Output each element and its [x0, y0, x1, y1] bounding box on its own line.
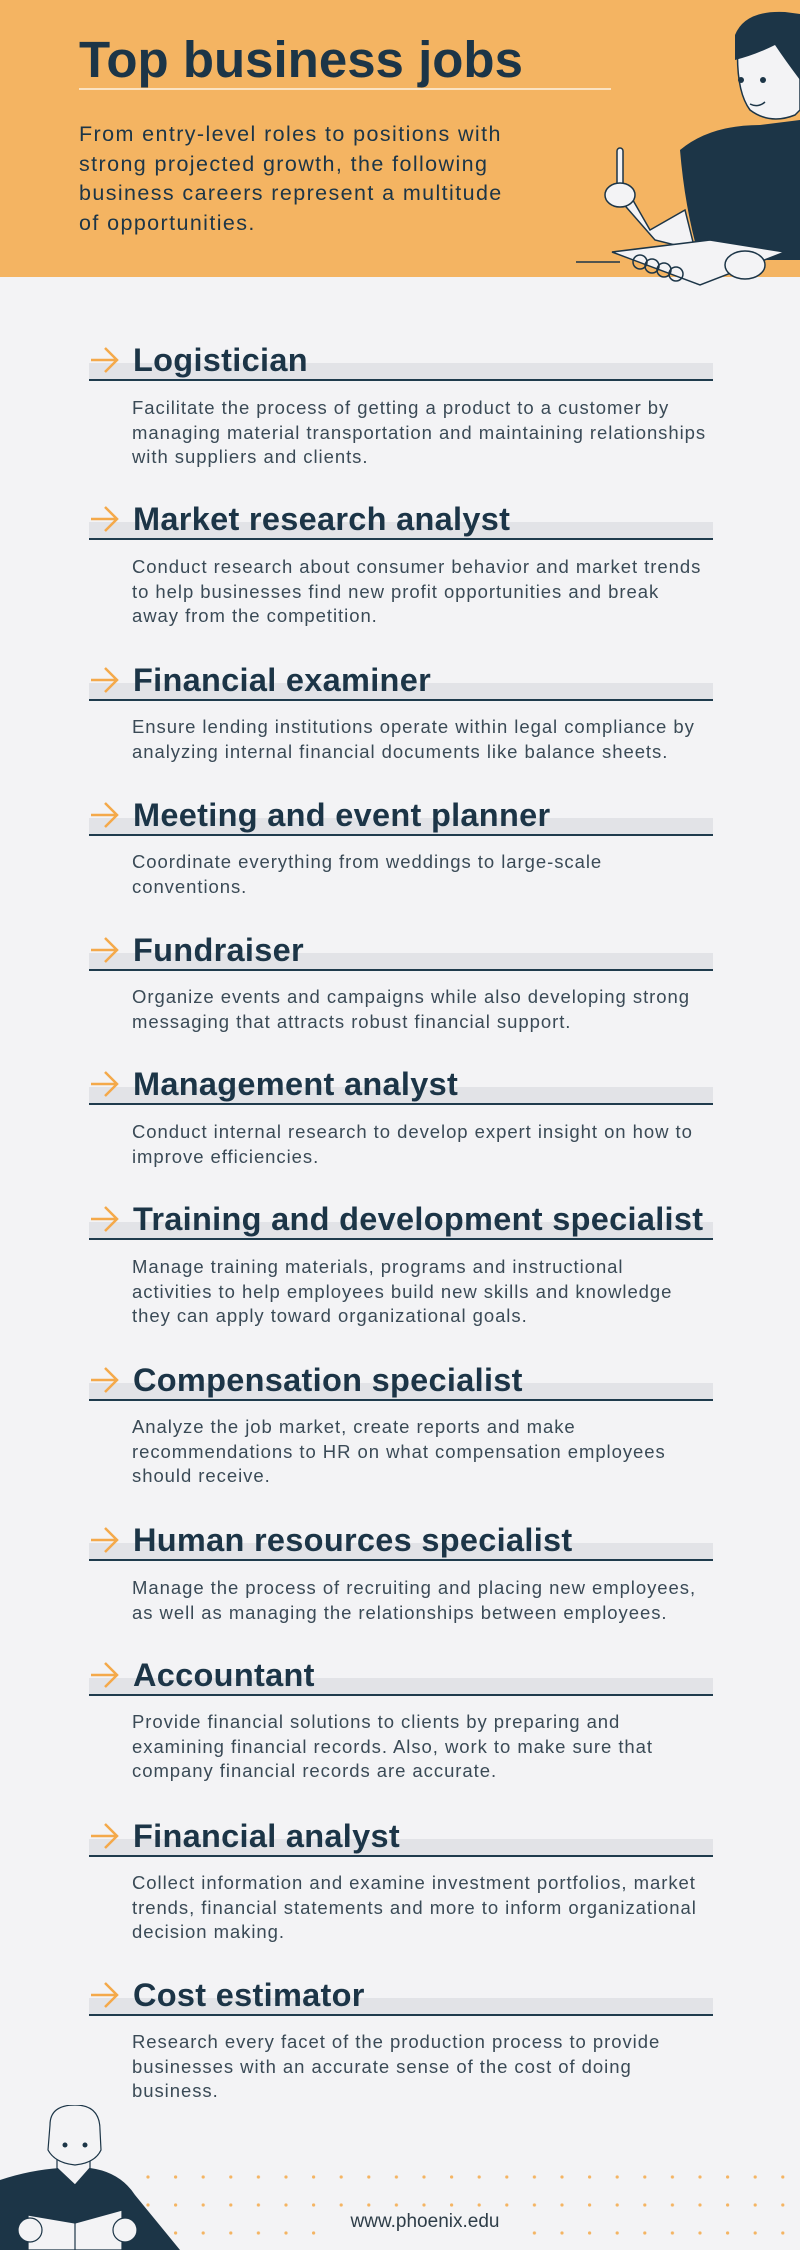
title: Top business jobs — [79, 31, 523, 88]
text: Organize events and campaigns while also developing strong — [132, 986, 690, 1007]
item: Logistician — [89, 342, 713, 381]
item: Financial examiner — [89, 662, 713, 701]
footer dot pattern — [146, 2175, 785, 2235]
text: they can apply toward organizational goals. — [132, 1305, 528, 1326]
item: Accountant: Accountant — [133, 1657, 315, 1693]
text: away from the competition. — [132, 605, 378, 626]
item: Financial analyst: Financial analyst — [133, 1818, 400, 1854]
text: company financial records are accurate. — [132, 1760, 497, 1781]
item: Financial examiner: Financial examiner — [133, 662, 431, 698]
text: trends, financial statements and more to inform organizational — [132, 1896, 697, 1918]
item: Human resources specialist — [89, 1522, 713, 1561]
header band — [0, 0, 800, 277]
item: Human resources specialist: Human resources specialist — [133, 1522, 573, 1558]
item: Accountant — [89, 1657, 713, 1696]
item: Management analyst — [89, 1066, 713, 1105]
text: to help businesses find new profit opportunities and break — [132, 580, 659, 602]
text: improve efficiencies. — [132, 1146, 319, 1166]
item: Logistician: Logistician — [133, 342, 308, 378]
text: with suppliers and clients. — [132, 446, 368, 467]
text: should receive. — [132, 1465, 271, 1486]
intro text — [79, 122, 503, 234]
item: Compensation specialist: Compensation specialist — [133, 1362, 523, 1398]
item: Management analyst: Management analyst — [133, 1066, 458, 1102]
text: conventions. — [132, 876, 247, 896]
item: Fundraiser: Fundraiser — [133, 932, 304, 968]
text: activities to help employees build new skills and knowledge — [132, 1280, 672, 1302]
text: Conduct research about consumer behavior and market trends — [132, 556, 701, 577]
text: decision making. — [132, 1921, 285, 1942]
text: Analyze the job market, create reports and make — [132, 1416, 576, 1437]
item: Market research analyst: Market research analyst — [133, 501, 510, 537]
text: Coordinate everything from weddings to large-scale — [132, 851, 602, 872]
item: Meeting and event planner — [89, 797, 713, 836]
text: as well as managing the relationships between employees. — [132, 1602, 668, 1622]
text: Collect information and examine investment portfolios, market — [132, 1872, 696, 1893]
text: Manage the process of recruiting and placing new employees, — [132, 1577, 696, 1598]
item: Meeting and event planner: Meeting and event planner — [133, 797, 550, 833]
footer url: www.phoenix.edu — [351, 2211, 499, 2232]
text: Conduct internal research to develop expert insight on how to — [132, 1121, 693, 1142]
intro text: strong projected growth, the following — [79, 152, 488, 176]
item: Market research analyst — [89, 501, 713, 540]
text: Research every facet of the production process to provide — [132, 2031, 660, 2052]
text: analyzing internal financial documents like balance sheets. — [132, 740, 668, 762]
item: Cost estimator: Cost estimator — [133, 1977, 365, 2013]
text: Provide financial solutions to clients by preparing and — [132, 1711, 620, 1732]
text: business. — [132, 2080, 219, 2101]
item: Training and development specialist: Training and development specialist — [133, 1201, 703, 1237]
intro text: of opportunities. — [79, 210, 256, 234]
text: messaging that attracts robust financial support. — [132, 1010, 571, 1032]
item: Fundraiser — [89, 932, 713, 971]
item: Cost estimator — [89, 1977, 713, 2016]
text: businesses with an accurate sense of the cost of doing — [132, 2056, 632, 2076]
text: Facilitate the process of getting a product to a customer by — [132, 397, 669, 418]
text: recommendations to HR on what compensation employees — [132, 1440, 666, 1462]
intro text: From entry-level roles to positions with — [79, 122, 502, 146]
text: Ensure lending institutions operate within legal compliance by — [132, 716, 695, 737]
text: managing material transportation and maintaining relationships — [132, 422, 706, 442]
item: Compensation specialist — [89, 1362, 713, 1401]
item: Financial analyst — [89, 1818, 713, 1857]
illustration: man writing — [576, 12, 800, 286]
text: Manage training materials, programs and instructional — [132, 1256, 624, 1277]
illustration: man reading — [0, 2105, 180, 2250]
text: examining financial records. Also, work to make sure that — [132, 1736, 653, 1756]
intro text: business careers represent a multitude — [79, 181, 503, 205]
